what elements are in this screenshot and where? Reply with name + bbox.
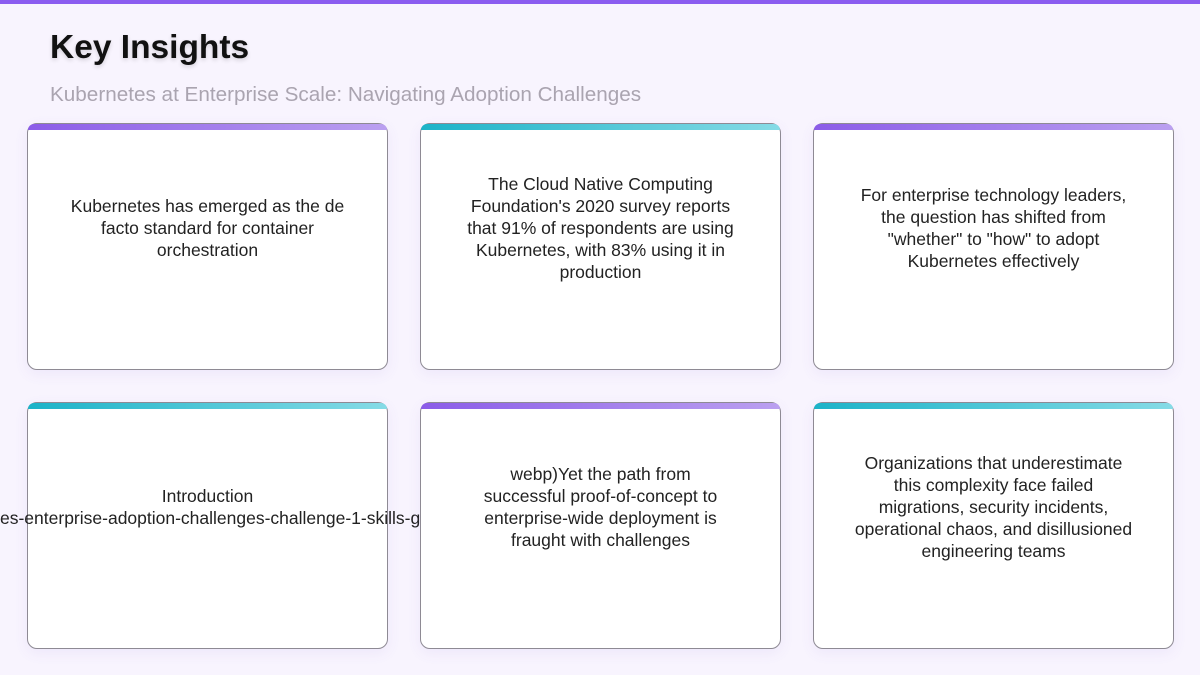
subtitle: Kubernetes at Enterprise Scale: Navigating Adoption Challenges bbox=[50, 83, 641, 106]
card 6: Organizations that underestimate this complexity face failed migrations, security incidents, operational chaos, and disillusioned engineering teams bbox=[855, 452, 1132, 560]
card 4: Introduction bbox=[162, 486, 253, 506]
card 2 bbox=[420, 123, 781, 370]
card 2: The Cloud Native Computing Foundation's 2020 survey reports that 91% of respondents are using Kubernetes, with 83% using it in production bbox=[467, 174, 734, 282]
card 3 bbox=[813, 123, 1174, 370]
card 4 bbox=[27, 402, 388, 649]
card 3: For enterprise technology leaders, the question has shifted from "whether" to "how" to adopt Kubernetes effectively bbox=[861, 184, 1126, 270]
card 6 bbox=[813, 402, 1174, 649]
card 5: webp)Yet the path from successful proof-of-concept to enterprise-wide deployment is fraught with challenges bbox=[484, 464, 717, 550]
card 1 bbox=[27, 123, 388, 370]
card 1: Kubernetes has emerged as the de facto standard for container orchestration bbox=[71, 196, 344, 260]
card 5 bbox=[420, 402, 781, 649]
card 4: es-enterprise-adoption-challenges-challenge-1-skills-gap bbox=[0, 508, 440, 528]
title: Key Insights bbox=[50, 29, 249, 66]
